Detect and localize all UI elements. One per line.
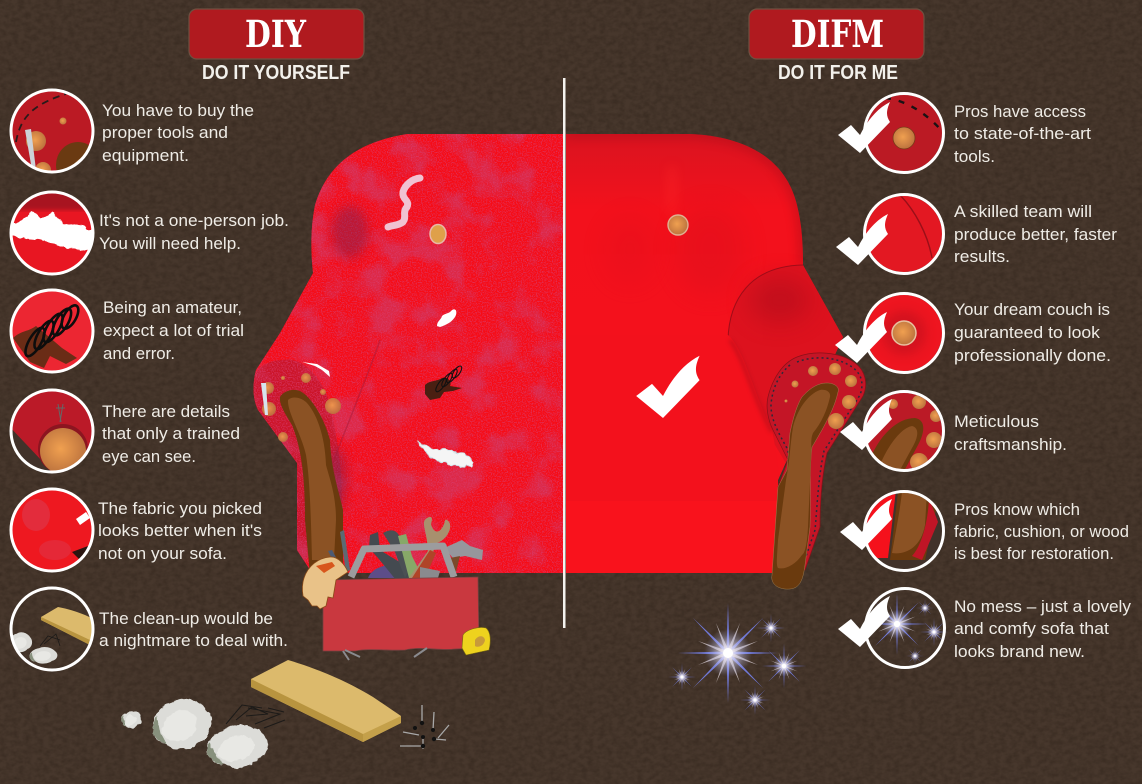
text: equipment.: [102, 146, 189, 165]
panel: DIY item 1: [10, 88, 254, 174]
panel: DIY item 4: [8, 390, 240, 480]
text: is best for restoration.: [954, 544, 1114, 563]
check: [838, 102, 890, 153]
glove: [302, 557, 348, 609]
icon: torn white stuffing: [8, 190, 98, 275]
icon: stud close-up: [10, 388, 94, 474]
scratchy metal wires: [226, 705, 285, 728]
right arm studs: [784, 363, 857, 429]
text: eye can see.: [102, 447, 196, 466]
white stuffing: [418, 443, 474, 467]
panel: DIY item 6: [9, 588, 288, 670]
sparkles: [668, 603, 806, 715]
text: a nightmare to deal with.: [99, 631, 288, 650]
icon: sparkles: [838, 588, 948, 668]
seat cushion: [728, 335, 779, 486]
icon: debris: [9, 588, 100, 670]
text: and comfy sofa that: [954, 619, 1109, 638]
cotton scraps: [121, 699, 272, 771]
text: and error.: [103, 344, 175, 363]
panel: DIY side sofa: [250, 130, 566, 575]
seat front: [566, 501, 780, 573]
left arm wood light: [288, 398, 336, 560]
white torn patch: [437, 309, 456, 327]
screws: [343, 648, 427, 660]
toolbox body: [323, 577, 479, 651]
panel: DIFM item 3: [835, 290, 1111, 380]
panel: DIY item 2: [8, 190, 289, 275]
tape measure window: [475, 636, 485, 647]
scattered nails: [400, 705, 449, 749]
text: The clean-up would be: [99, 609, 273, 628]
DIY title: DIY: [245, 12, 306, 56]
text: It's not a one-person job.: [99, 211, 289, 230]
text: proper tools and: [102, 123, 228, 142]
heading: DIY: [189, 9, 364, 84]
panel: DIY item 5: [8, 489, 262, 575]
text: Pros have access: [954, 102, 1086, 121]
text: to state-of-the-art: [954, 124, 1091, 143]
text: You will need help.: [99, 234, 241, 253]
panel: DIFM side sofa: [566, 130, 866, 589]
DIFM badge: [749, 9, 924, 59]
icon: wood leg: [840, 490, 950, 575]
text: fabric, cushion, or wood: [954, 522, 1129, 541]
panel: DIFM item 5: [840, 490, 1129, 575]
icon: neat stitched arm: [838, 90, 950, 175]
DIY subtitle: DO IT YOURSELF: [202, 62, 350, 84]
DIFM title: DIFM: [791, 12, 884, 56]
text: expect a lot of trial: [103, 321, 244, 340]
right arm upholstery: [767, 353, 866, 570]
left arm studs: [262, 373, 341, 442]
pink squiggle: [388, 178, 420, 227]
toolbox: [302, 517, 490, 660]
text: tools.: [954, 147, 995, 166]
heading: DIFM: [749, 9, 924, 84]
exposed spring: [425, 365, 463, 400]
text: You have to buy the: [102, 101, 254, 120]
left back button: [430, 224, 446, 244]
panel: DIFM item 2: [836, 190, 1117, 280]
check: [835, 312, 887, 363]
icon: patchy fabric: [8, 489, 98, 575]
white thread: [302, 362, 330, 377]
text: not on your sofa.: [98, 544, 227, 563]
toolbox handle: [351, 546, 454, 577]
DIY badge: [189, 9, 364, 59]
check: [836, 214, 888, 265]
needle on arm: [261, 383, 268, 415]
icon: smooth seam: [836, 193, 945, 275]
check: [840, 499, 892, 550]
wood plank: [251, 660, 401, 742]
inner wing: [728, 265, 850, 470]
panel: DIFM item 4: [840, 390, 1067, 475]
text: Meticulous: [954, 412, 1039, 431]
tape measure: [462, 627, 490, 655]
text: Your dream couch is: [954, 300, 1110, 319]
text: Being an amateur,: [103, 298, 242, 317]
text: craftsmanship.: [954, 435, 1067, 454]
stitching: [771, 358, 862, 565]
panel: DIFM item 1: [838, 90, 1091, 175]
left arm wood dark: [280, 390, 343, 575]
icon: studded arm: [840, 390, 950, 475]
check: [840, 399, 892, 450]
divider line: [563, 78, 566, 628]
text: The fabric you picked: [98, 499, 262, 518]
glove patch: [316, 562, 335, 573]
text: No mess – just a lovely: [954, 597, 1131, 616]
right arm wood light: [777, 390, 830, 568]
text: produce better, faster: [954, 225, 1117, 244]
text: There are details: [102, 402, 230, 421]
icon: sofa arm with needle: [10, 88, 94, 174]
text: Pros know which: [954, 500, 1080, 519]
text: A skilled team will: [954, 202, 1092, 221]
right back button: [668, 215, 688, 235]
icon: button: [835, 292, 945, 374]
text: guaranteed to look: [954, 323, 1101, 342]
text: that only a trained: [102, 424, 240, 443]
text: looks brand new.: [954, 642, 1085, 661]
icon: spring and burnt fabric: [8, 290, 98, 375]
text: looks better when it's: [98, 521, 262, 540]
big check mark: [636, 356, 700, 418]
tools in toolbox: [328, 517, 483, 580]
check: [838, 596, 890, 647]
panel: DIY item 3: [8, 290, 244, 375]
panel: DIFM item 6: [838, 588, 1131, 668]
right arm wood dark: [772, 383, 838, 589]
DIFM subtitle: DO IT FOR ME: [778, 62, 898, 84]
text: results.: [954, 247, 1010, 266]
text: professionally done.: [954, 346, 1111, 365]
